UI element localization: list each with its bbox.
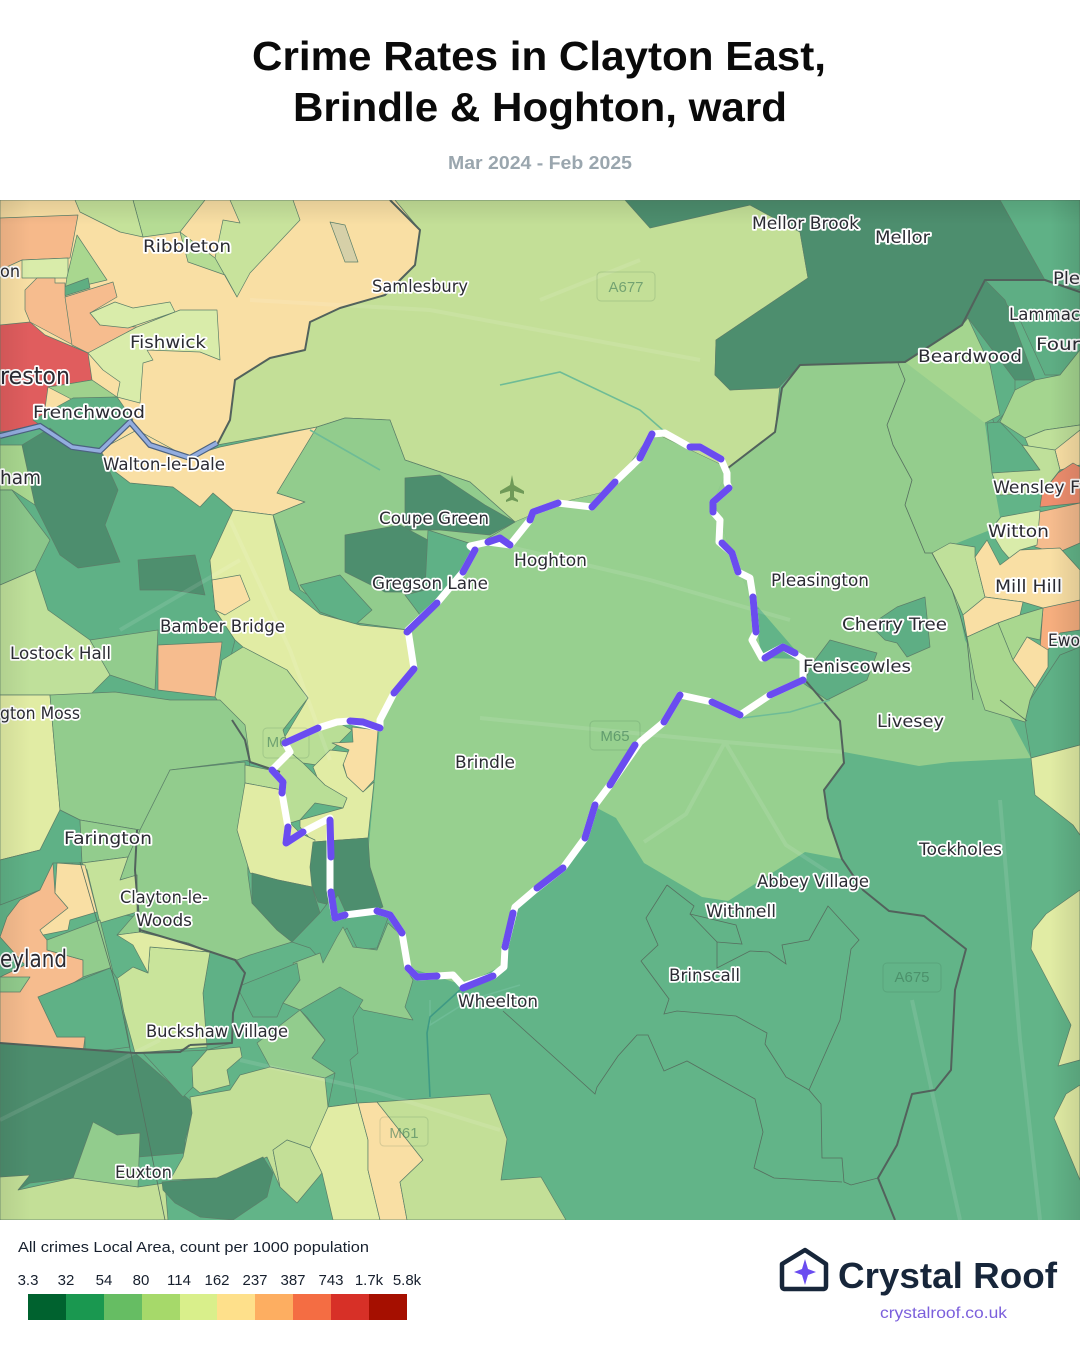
place name labels: Buckshaw Village [146, 1022, 288, 1042]
place name labels: Tockholes [918, 840, 1002, 860]
place name labels: Fishwick [130, 333, 206, 353]
place name labels: gton Moss [0, 704, 80, 724]
place name labels: Brinscall [669, 966, 740, 986]
place name labels: Cherry Tree [842, 615, 947, 635]
place name labels: Mellor [875, 228, 930, 248]
place name labels: Coupe Green [379, 509, 489, 529]
place name labels: Clayton-le- [120, 888, 208, 908]
title: Crime Rates in Clayton East, [252, 33, 826, 79]
legend scale values: 114 [167, 1272, 191, 1289]
place name labels: Feniscowles [803, 657, 911, 677]
place name labels: Lammac [1009, 305, 1080, 325]
road number labels: A675 [894, 969, 930, 986]
legend scale values: 32 [58, 1272, 74, 1289]
road number labels: A677 [608, 279, 644, 296]
place name labels: Hoghton [514, 551, 587, 571]
place name labels: Withnell [706, 902, 776, 922]
place name labels: Brindle [455, 753, 515, 773]
logo url: crystalroof.co.uk [880, 1305, 1008, 1322]
logo: Crystal Roof [782, 1250, 1058, 1322]
map regions: Samlesbury and Mellor [217, 200, 1080, 522]
place name labels: on [0, 262, 20, 282]
place name labels: Samlesbury [372, 277, 468, 297]
road number labels: M61 [389, 1125, 419, 1142]
place name labels: Abbey Village [757, 872, 869, 892]
legend scale values: 743 [318, 1272, 344, 1289]
legend colour scale [28, 1294, 407, 1320]
legend scale values: 5.8k [393, 1272, 422, 1289]
place name labels: ham [0, 467, 41, 489]
road number labels [263, 272, 941, 1146]
legend title: All crimes Local Area, count per 1000 population [18, 1239, 369, 1256]
place name labels: Walton-le-Dale [103, 455, 225, 475]
place name labels: Euxton [115, 1163, 172, 1183]
legend scale values [18, 1272, 422, 1289]
place name labels: Ple [1053, 269, 1080, 289]
place name labels: Beardwood [918, 347, 1022, 367]
legend scale values: 80 [133, 1272, 149, 1289]
icon: house with star [782, 1250, 826, 1289]
logo wordmark: Crystal Roof [838, 1255, 1058, 1296]
place name labels: Livesey [877, 712, 944, 732]
map regions: Blackburn mosaic [803, 422, 1080, 758]
place name labels: Witton [988, 522, 1049, 542]
subtitle: date range: Mar 2024 - Feb 2025 [448, 153, 632, 173]
title: Brindle & Hoghton, ward [293, 84, 787, 130]
place name labels: eyland [0, 945, 67, 973]
map regions: south central [0, 863, 566, 1220]
place name labels: Lostock Hall [10, 644, 111, 664]
legend scale values: 237 [242, 1272, 268, 1289]
map edge shading [0, 200, 1080, 1220]
choropleth map [0, 200, 1080, 1220]
legend scale values: 54 [96, 1272, 112, 1289]
place name labels: Mill Hill [995, 577, 1062, 597]
road number labels: M65 [600, 728, 630, 745]
map regions: far east edge [1031, 745, 1080, 1180]
place name labels: Woods [136, 911, 192, 931]
place name labels: Mellor Brook [752, 214, 859, 234]
place name labels: Wheelton [458, 992, 538, 1012]
place name labels: Ribbleton [143, 237, 231, 257]
title [252, 33, 826, 130]
place name labels: Frenchwood [33, 403, 145, 423]
place name labels: Wensley F [993, 478, 1080, 498]
legend scale values: 1.7k [355, 1272, 384, 1289]
place name labels: reston [0, 362, 70, 390]
legend scale values: 3.3 [18, 1272, 38, 1289]
map regions: Preston and north west [0, 200, 420, 457]
place name labels: Bamber Bridge [160, 617, 285, 637]
place name labels: Farington [64, 829, 152, 849]
river Darwen and streams [310, 372, 830, 1097]
legend scale values: 162 [204, 1272, 230, 1289]
ward boundary: Clayton East, Brindle & Hoghton [272, 433, 803, 988]
legend [18, 1239, 422, 1320]
icon: airport [500, 475, 524, 502]
road number labels: M6 [267, 734, 287, 751]
map regions: Bamber Bridge and west [0, 418, 515, 965]
motorway and district lines [80, 363, 1027, 1220]
legend scale values: 387 [280, 1272, 306, 1289]
roads [0, 260, 1040, 1220]
place name labels: Four [1036, 335, 1080, 355]
map regions: Pleasington and ward area [368, 362, 1031, 985]
place name labels: Pleasington [771, 571, 869, 591]
river Ribble [0, 422, 217, 458]
ward and borough boundaries [0, 200, 1080, 1220]
place name labels: Gregson Lane [372, 574, 488, 594]
place name labels [0, 214, 1080, 1183]
